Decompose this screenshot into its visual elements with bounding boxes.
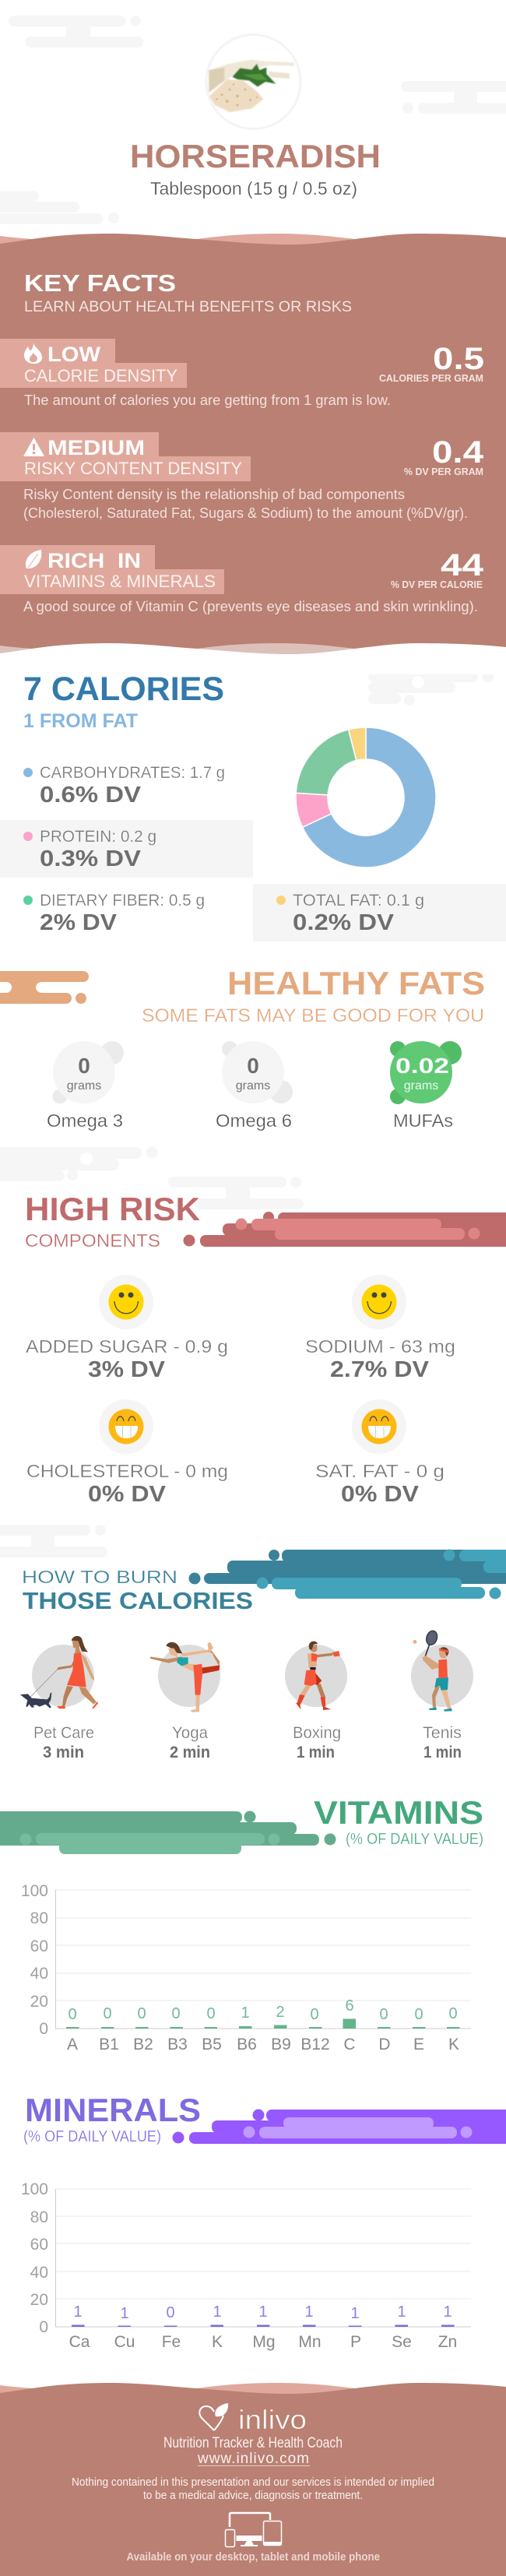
description bbox=[23, 487, 468, 521]
bar chart: vitamins: 40 bbox=[30, 1965, 48, 1983]
bar chart: vitamins: 6 bbox=[345, 1997, 354, 2015]
legend: total fat: TOTAL FAT: 0.1 g bbox=[293, 892, 424, 910]
activity labels: Tenis bbox=[423, 1724, 462, 1742]
bar chart: minerals: 1 bbox=[350, 2305, 360, 2322]
bar chart: vitamins: 0 bbox=[103, 2005, 112, 2022]
panel: vitamins bbox=[0, 1794, 483, 2053]
omega 3: Omega 3 bbox=[47, 1110, 123, 1131]
bar chart: vitamins: 0 bbox=[310, 2006, 319, 2023]
fact: low calorie density bbox=[0, 339, 484, 408]
bar chart: minerals: 20 bbox=[30, 2291, 48, 2309]
bar chart: vitamins: 0 bbox=[39, 2020, 48, 2038]
donut chart bbox=[296, 727, 436, 867]
activity: pet care bbox=[20, 1636, 98, 1709]
disclaimer bbox=[72, 2476, 434, 2502]
saturated fat bbox=[315, 1399, 445, 1507]
bar chart: vitamins: 0 bbox=[448, 2005, 458, 2022]
bar chart: vitamins: 80 bbox=[30, 1909, 48, 1927]
bar chart: vitamins: 0 bbox=[137, 2005, 146, 2022]
panel: key facts bbox=[0, 234, 506, 674]
bar chart: minerals: 1 bbox=[397, 2303, 406, 2321]
bar chart: vitamins: 100 bbox=[21, 1882, 48, 1900]
omega 6 bbox=[216, 1041, 293, 1131]
bar chart: vitamins: A bbox=[67, 2036, 78, 2053]
bar chart: minerals: Zn bbox=[438, 2333, 457, 2351]
bar chart: vitamins: 20 bbox=[30, 1993, 48, 2011]
bar chart: minerals: Cu bbox=[114, 2333, 135, 2351]
food photo: horseradish bbox=[206, 34, 300, 129]
mufas: MUFAs bbox=[393, 1110, 453, 1131]
unit: % DV PER GRAM bbox=[404, 466, 483, 477]
description: Risky Content density is the relationship of bad components bbox=[23, 487, 405, 502]
disclaimer: Nothing contained in this presentation and our services is intended or implied bbox=[72, 2476, 434, 2489]
decoration: teal bars bbox=[188, 1550, 506, 1599]
legend: total fat: 0.2% DV bbox=[293, 910, 395, 935]
bar chart: vitamins: 0 bbox=[68, 2006, 77, 2023]
description: (Cholesterol, Saturated Fat, Sugars & Sodium) to the amount (%DV/gr). bbox=[23, 505, 468, 521]
subheading: SOME FATS MAY BE GOOD FOR YOU bbox=[142, 1005, 484, 1026]
bar chart: vitamins: C bbox=[343, 2036, 356, 2053]
heading: how to burn: HOW TO BURN bbox=[22, 1567, 177, 1587]
legend: dietary fiber: DIETARY FIBER: 0.5 g bbox=[40, 892, 205, 910]
mufas: grams bbox=[404, 1079, 438, 1093]
panel: high risk bbox=[25, 1191, 506, 1507]
bar chart: minerals: 100 bbox=[21, 2180, 48, 2198]
bar chart: minerals: 1 bbox=[443, 2303, 452, 2321]
cholesterol: CHOLESTEROL - 0 mg bbox=[26, 1461, 228, 1481]
bar chart: minerals: 0 bbox=[166, 2304, 175, 2321]
description: The amount of calories you are getting from 1 gram is low. bbox=[24, 392, 391, 408]
bar chart: vitamins: K bbox=[448, 2036, 459, 2053]
subheading: LEARN ABOUT HEALTH BENEFITS OR RISKS bbox=[24, 298, 352, 315]
subheading: COMPONENTS bbox=[25, 1230, 160, 1251]
subheading: from fat: 1 FROM FAT bbox=[23, 710, 138, 732]
bar chart: vitamins: B6 bbox=[237, 2036, 257, 2053]
bar chart: vitamins: B12 bbox=[300, 2036, 330, 2053]
fact: medium risky content density bbox=[0, 432, 484, 521]
bar chart: minerals: 60 bbox=[30, 2236, 48, 2254]
bar chart: vitamins: 60 bbox=[30, 1937, 48, 1955]
bar chart: vitamins: B9 bbox=[271, 2036, 291, 2053]
logo: wordmark: inlivo bbox=[238, 2405, 307, 2435]
sodium: SODIUM - 63 mg bbox=[305, 1336, 455, 1357]
added sugar bbox=[26, 1275, 228, 1382]
decoration: green bars bbox=[0, 1811, 336, 1854]
activity labels: Boxing bbox=[293, 1724, 341, 1742]
activity: boxing bbox=[285, 1642, 347, 1710]
value: 0.4 bbox=[432, 435, 484, 470]
bar chart: vitamins: D bbox=[378, 2036, 391, 2053]
bar chart: vitamins: 0 bbox=[171, 2005, 181, 2022]
activity labels: Pet Care bbox=[33, 1724, 94, 1742]
bar chart: vitamins: B1 bbox=[99, 2036, 119, 2053]
bar chart: minerals: Fe bbox=[162, 2333, 181, 2351]
legend: protein bbox=[23, 828, 156, 871]
bar chart: vitamins: 1 bbox=[241, 2004, 250, 2022]
serving size: Tablespoon (15 g / 0.5 oz) bbox=[150, 178, 357, 199]
bar chart: vitamins: 0 bbox=[414, 2006, 423, 2023]
bar chart: vitamins: 0 bbox=[206, 2005, 216, 2022]
icon: flame bbox=[24, 343, 42, 364]
panel: healthy fats bbox=[0, 965, 485, 1131]
rating: LOW bbox=[47, 343, 101, 366]
bar chart: vitamins: 2 bbox=[276, 2004, 285, 2021]
mufas: 0.02 bbox=[395, 1054, 449, 1078]
bar chart: minerals: 80 bbox=[30, 2208, 48, 2226]
heading: healthy fats: HEALTHY FATS bbox=[227, 965, 485, 1001]
panel: calories bbox=[0, 670, 506, 941]
subheading: (% OF DAILY VALUE) bbox=[346, 1831, 483, 1848]
cholesterol: 0% DV bbox=[88, 1482, 167, 1507]
activity labels: Yoga bbox=[172, 1724, 208, 1742]
panel: how to burn calories bbox=[20, 1550, 506, 1761]
sodium bbox=[305, 1275, 455, 1382]
sodium: 2.7% DV bbox=[330, 1357, 430, 1382]
bar chart: minerals: 1 bbox=[120, 2305, 129, 2322]
omega 3 bbox=[47, 1041, 124, 1131]
bar chart: minerals: 0 bbox=[39, 2318, 48, 2336]
bar chart: vitamins: 0 bbox=[379, 2006, 388, 2023]
rating: MEDIUM bbox=[47, 436, 145, 459]
legend: carbohydrates: CARBOHYDRATES: 1.7 g bbox=[40, 764, 225, 782]
title: HORSERADISH bbox=[130, 138, 381, 174]
bar chart: minerals: P bbox=[350, 2333, 361, 2351]
mufas bbox=[390, 1041, 462, 1131]
activity: yoga bbox=[150, 1642, 220, 1712]
legend: total fat bbox=[276, 892, 424, 935]
legend: dietary fiber: 2% DV bbox=[40, 910, 118, 935]
saturated fat: 0% DV bbox=[341, 1482, 420, 1507]
omega 3: 0 bbox=[78, 1054, 90, 1078]
tagline: Nutrition Tracker & Health Coach bbox=[163, 2435, 343, 2451]
value: 0.5 bbox=[433, 342, 484, 376]
legend: carbohydrates: 0.6% DV bbox=[40, 783, 142, 808]
bar chart: minerals: 40 bbox=[30, 2264, 48, 2282]
activity labels: 1 min bbox=[297, 1744, 335, 1761]
heading: those calories: THOSE CALORIES bbox=[23, 1587, 253, 1614]
bar chart: vitamins: B2 bbox=[133, 2036, 153, 2053]
omega 6: grams bbox=[236, 1079, 270, 1093]
activity: tennis bbox=[411, 1629, 473, 1712]
activity labels: 2 min bbox=[170, 1744, 210, 1761]
activity labels: 3 min bbox=[43, 1744, 84, 1761]
bar chart: minerals: 1 bbox=[73, 2303, 83, 2321]
icon: warning triangle bbox=[23, 438, 44, 456]
bar chart: minerals: 1 bbox=[258, 2303, 268, 2321]
omega 6: 0 bbox=[247, 1054, 259, 1078]
heading: high risk: HIGH RISK bbox=[25, 1191, 200, 1227]
activity labels bbox=[33, 1724, 462, 1761]
saturated fat: SAT. FAT - 0 g bbox=[315, 1461, 445, 1481]
bar chart: minerals: Ca bbox=[69, 2333, 90, 2351]
icon: leaf bbox=[26, 550, 41, 568]
heading: minerals: MINERALS bbox=[25, 2092, 201, 2128]
bar chart: minerals: 1 bbox=[304, 2303, 314, 2321]
website: www.inlivo.com bbox=[197, 2451, 309, 2467]
bar chart: minerals: Mg bbox=[252, 2333, 276, 2351]
unit: CALORIES PER GRAM bbox=[379, 373, 483, 384]
bar chart: vitamins: B3 bbox=[167, 2036, 188, 2053]
omega 6: Omega 6 bbox=[216, 1110, 292, 1131]
decoration: red bars bbox=[184, 1212, 506, 1247]
omega 3: grams bbox=[67, 1079, 101, 1093]
panel: footer bbox=[0, 2383, 506, 2576]
label: VITAMINS & MINERALS bbox=[24, 572, 216, 591]
legend: protein: 0.3% DV bbox=[40, 846, 142, 871]
bar chart: vitamins: E bbox=[413, 2036, 424, 2053]
rating: RICH IN bbox=[47, 549, 141, 572]
added sugar: 3% DV bbox=[88, 1357, 166, 1382]
fact: rich in vitamins and minerals bbox=[0, 545, 484, 614]
description: A good source of Vitamin C (prevents eye diseases and skin wrinkling). bbox=[23, 599, 478, 614]
decoration: purple bars bbox=[173, 2109, 506, 2144]
bar chart: vitamins bbox=[21, 1882, 471, 2053]
heading: calories: 7 CALORIES bbox=[23, 670, 224, 708]
bar chart: minerals: 1 bbox=[213, 2303, 222, 2321]
legend: carbohydrates bbox=[23, 764, 225, 808]
heading: vitamins: VITAMINS bbox=[314, 1794, 483, 1831]
panel: minerals bbox=[21, 2092, 506, 2351]
bar chart: minerals: K bbox=[212, 2333, 223, 2351]
decoration: orange bars bbox=[0, 971, 89, 1004]
legend: dietary fiber bbox=[23, 892, 205, 935]
unit: % DV PER CALORIE bbox=[391, 579, 483, 590]
added sugar: ADDED SUGAR - 0.9 g bbox=[26, 1336, 228, 1357]
icon: devices bbox=[226, 2513, 282, 2546]
activity labels: 1 min bbox=[423, 1744, 462, 1761]
legend: protein: PROTEIN: 0.2 g bbox=[40, 828, 156, 846]
logo: heart and leaf bbox=[199, 2403, 228, 2430]
cholesterol bbox=[26, 1399, 228, 1507]
bar chart: minerals bbox=[21, 2180, 471, 2351]
availability note: Available on your desktop, tablet and mobile phone bbox=[126, 2550, 380, 2564]
disclaimer: to be a medical advice, diagnosis or treatment. bbox=[143, 2489, 363, 2502]
heading: key facts: KEY FACTS bbox=[24, 269, 176, 297]
label: RISKY CONTENT DENSITY bbox=[24, 459, 242, 478]
subheading: (% OF DAILY VALUE) bbox=[23, 2128, 161, 2145]
bar chart: minerals: Se bbox=[392, 2333, 412, 2351]
bar chart: vitamins: B5 bbox=[202, 2036, 222, 2053]
value: 44 bbox=[441, 548, 484, 582]
label: CALORIE DENSITY bbox=[24, 366, 177, 385]
bar chart: minerals: Mn bbox=[298, 2333, 322, 2351]
